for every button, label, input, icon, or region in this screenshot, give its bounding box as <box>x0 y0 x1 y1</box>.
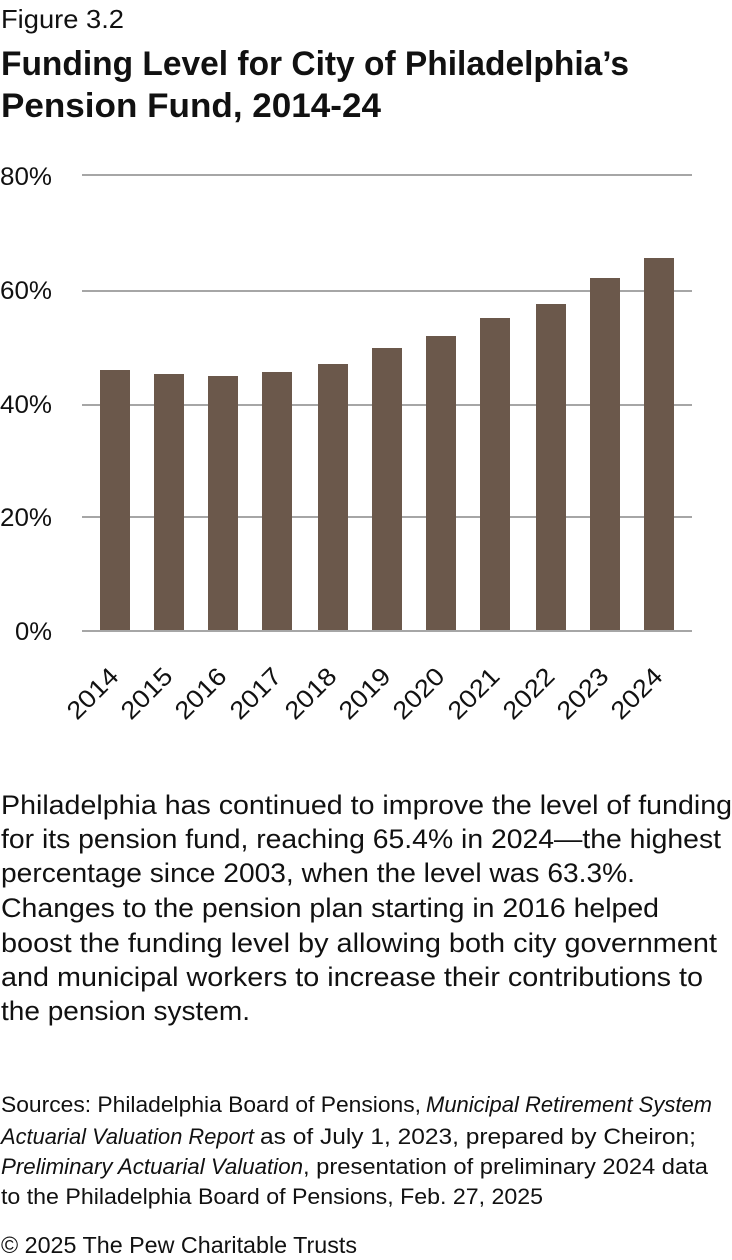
bar chart <box>0 163 692 725</box>
sources: Sources: Philadelphia Board of Pensions, <box>1 1092 421 1117</box>
figure label: Figure 3.2 <box>1 4 124 34</box>
body paragraph: boost the funding level by allowing both city government <box>1 928 718 958</box>
body paragraph: the pension system. <box>1 996 250 1026</box>
copyright: © 2025 The Pew Charitable Trusts <box>1 1232 357 1258</box>
x axis labels: 2017 <box>224 662 287 725</box>
y axis labels: 80% <box>0 163 52 191</box>
x axis labels: 2018 <box>279 662 342 725</box>
x axis labels: 2020 <box>387 662 450 725</box>
y axis labels: 60% <box>0 277 52 305</box>
x axis labels: 2015 <box>115 662 178 725</box>
y axis labels: 40% <box>0 391 52 419</box>
title <box>1 45 629 125</box>
sources <box>0 1092 712 1209</box>
x axis labels: 2022 <box>497 662 560 725</box>
sources: , presentation of preliminary 2024 data <box>303 1154 709 1179</box>
body paragraph: percentage since 2003, when the level was 63.3%. <box>1 858 635 888</box>
sources: as of July 1, 2023, prepared by Cheiron; <box>260 1124 696 1149</box>
x axis labels: 2023 <box>551 662 614 725</box>
y axis labels <box>0 163 52 646</box>
x axis labels: 2016 <box>169 662 232 725</box>
y axis labels: 20% <box>0 504 52 532</box>
body paragraph <box>1 790 732 1026</box>
title: Funding Level for City of Philadelphia’s <box>1 45 629 83</box>
y axis labels: 0% <box>15 618 52 646</box>
bars <box>100 258 674 630</box>
x axis labels: 2021 <box>442 662 505 725</box>
sources: Actuarial Valuation Report <box>0 1124 256 1149</box>
sources: Municipal Retirement System <box>426 1092 712 1117</box>
sources: to the Philadelphia Board of Pensions, Feb. 27, 2025 <box>1 1184 543 1209</box>
title: Pension Fund, 2014-24 <box>1 87 381 125</box>
body paragraph: Changes to the pension plan starting in 2016 helped <box>1 893 659 923</box>
sources: Preliminary Actuarial Valuation <box>1 1154 303 1179</box>
x axis labels <box>61 662 668 725</box>
x axis labels: 2019 <box>333 662 396 725</box>
body paragraph: and municipal workers to increase their contributions to <box>1 962 703 992</box>
x axis labels: 2014 <box>61 662 124 725</box>
body paragraph: for its pension fund, reaching 65.4% in 2024—the highest <box>1 824 722 854</box>
body paragraph: Philadelphia has continued to improve the level of funding <box>1 790 732 820</box>
x axis labels: 2024 <box>605 662 668 725</box>
